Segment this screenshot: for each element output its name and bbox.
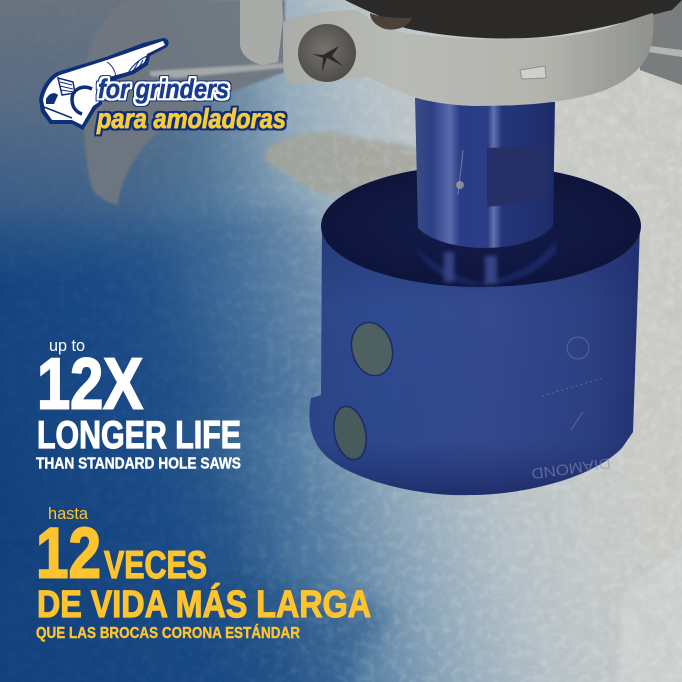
angle grinder clamp: [283, 10, 654, 106]
engraved markings: [530, 337, 612, 482]
icon: angle grinder: [39, 38, 169, 130]
motor housing, dark: [345, 0, 682, 39]
grinder arm: [240, 0, 283, 65]
upper vent hole: [346, 318, 398, 380]
shank reflection on rim: [415, 240, 556, 286]
engraved markings: DIAMOND: [530, 454, 612, 482]
QUE LAS BROCAS CORONA ESTÁNDAR: QUE LAS BROCAS CORONA ESTÁNDAR: [36, 625, 300, 642]
English claim text: [36, 336, 241, 472]
Spanish claim text: [36, 504, 371, 642]
background machine part, upper right: [640, 0, 682, 85]
VECES: VECES: [104, 544, 207, 587]
hole saw cup: [309, 165, 641, 495]
badge: for grinders / para amoladoras: [39, 38, 286, 134]
label: para amoladoras: para amoladoras: [96, 103, 286, 134]
label: for grinders: for grinders: [98, 74, 229, 104]
clamp rivet: [370, 13, 412, 30]
DE VIDA MÁS LARGA: DE VIDA MÁS LARGA: [37, 582, 371, 626]
cup side wall: [309, 225, 640, 495]
grinder guard: [83, 0, 285, 205]
blue arbor shank: [415, 98, 555, 248]
phillips bolt: [298, 24, 356, 82]
cup top face: [321, 165, 641, 287]
lower vent hole: [329, 403, 371, 463]
hasta: hasta: [48, 504, 89, 523]
clamp stamped tab: [520, 66, 546, 79]
12X: 12X: [37, 344, 143, 424]
THAN STANDARD HOLE SAWS: THAN STANDARD HOLE SAWS: [36, 456, 241, 472]
LONGER LIFE: LONGER LIFE: [37, 414, 241, 457]
12: 12: [36, 514, 101, 594]
up to: up to: [49, 336, 85, 355]
